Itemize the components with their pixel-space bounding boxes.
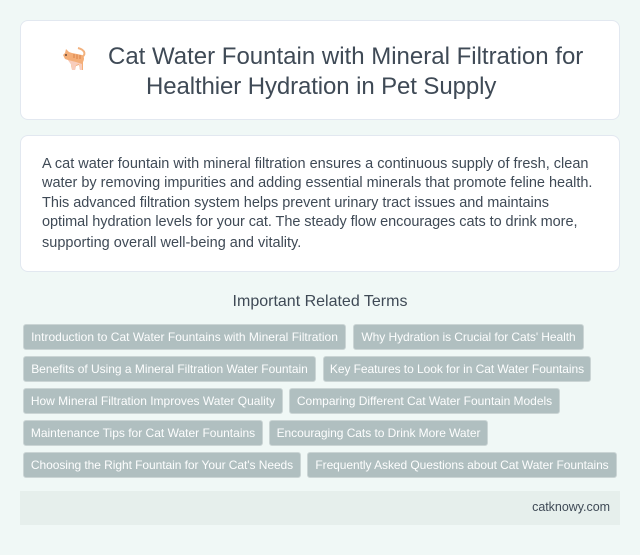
group: term tags [23,324,617,478]
text: site name: catknowy.com [532,500,610,514]
heading: title [108,43,583,100]
tag [23,324,346,350]
heading: important related terms: Important Related Terms [233,293,407,310]
text: description paragraph: water by removing impurities and adding essential minerals that promote feline health. [42,175,592,191]
text: description paragraph [42,156,592,251]
tag: Frequently Asked Questions about Cat Water Fountains [315,458,609,472]
heading: title: Cat Water Fountain with Mineral Filtration for [108,43,583,70]
tag [323,356,591,382]
tag [23,356,316,382]
panel: description [20,135,620,272]
tag: Key Features to Look for in Cat Water Fountains [330,362,584,376]
tag [269,420,488,446]
heading: title: Healthier Hydration in Pet Supply [146,73,496,100]
tag [353,324,584,350]
tag: Maintenance Tips for Cat Water Fountains [31,426,255,440]
footer bar [20,491,620,525]
tag: Encouraging Cats to Drink More Water [277,426,480,440]
tag: Benefits of Using a Mineral Filtration Water Fountain [31,362,308,376]
tag: Comparing Different Cat Water Fountain Models [297,394,552,408]
tag [307,452,617,478]
text: description paragraph: A cat water fountain with mineral filtration ensures a continuous supply of fresh, clean [42,156,588,172]
panel: title card [20,20,620,120]
tag: How Mineral Filtration Improves Water Quality [31,394,275,408]
text: description paragraph: supporting overall well-being and vitality. [42,235,301,251]
text: description paragraph: This advanced filtration system helps prevent urinary tract issues and maintains [42,195,549,211]
tag [23,420,263,446]
tag [23,452,301,478]
tag: Choosing the Right Fountain for Your Cat's Needs [31,458,293,472]
text: description paragraph: optimal hydration levels for your cat. The steady flow encourages cats to drink more, [42,214,577,230]
tag [23,388,283,414]
tag: Why Hydration is Crucial for Cats' Health [361,330,576,344]
tag [289,388,560,414]
icon: cat [63,47,86,70]
tag: Introduction to Cat Water Fountains with Mineral Filtration [31,330,338,344]
